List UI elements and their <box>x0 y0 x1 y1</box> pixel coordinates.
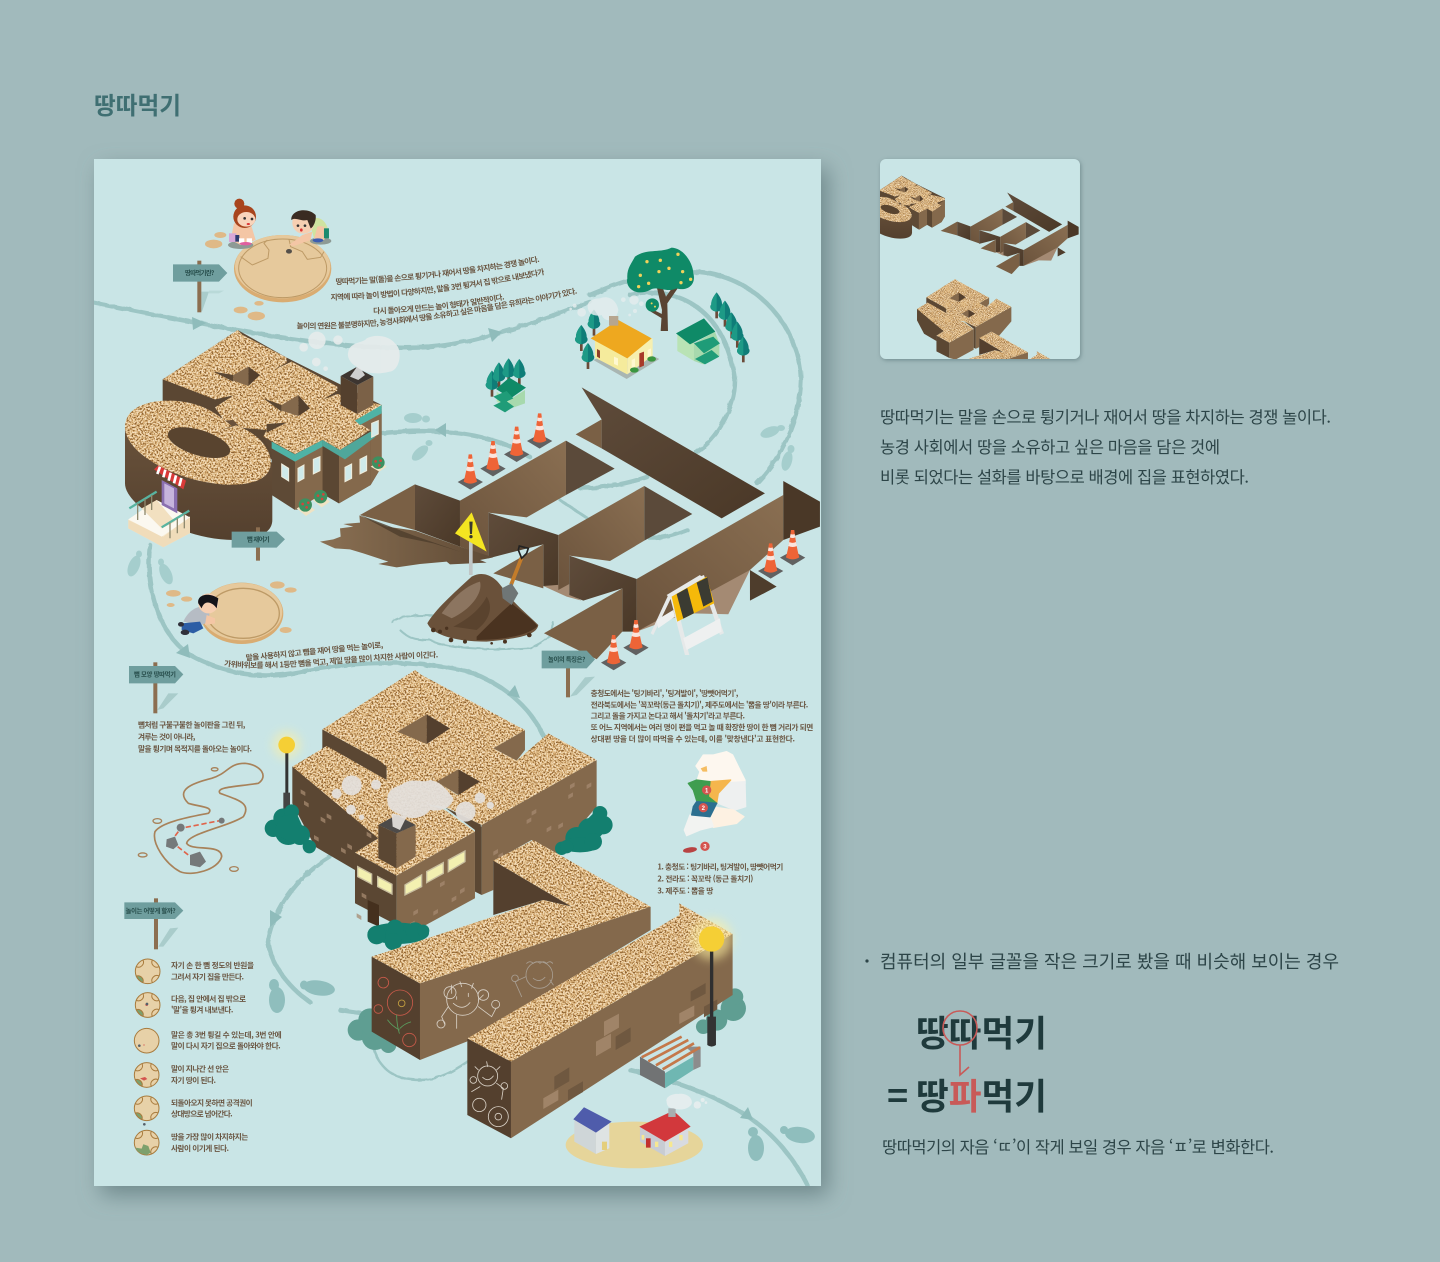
stepping stones <box>205 232 265 320</box>
winding route drawing <box>138 763 263 873</box>
text: rules <box>138 721 252 752</box>
sign: 뼘 재어기: 뼘 재어기 <box>247 534 270 543</box>
soil spill and trench <box>320 387 820 670</box>
thumbnail: middle letter <box>917 279 1011 360</box>
step descriptions: 자기 손 한 뼘 정도의 반원을 <box>171 960 254 971</box>
title: 땅따먹기 <box>94 86 181 121</box>
regional text: 상대편 땅을 더 많이 따먹을 수 있는데, 이를 '맞창낸다'고 표현한다. <box>591 733 795 744</box>
intro text on curve: 지역에 따라 놀이 방법이 다양하지만, 말을 3번 튕겨서 집 밖으로 내보냈다가 <box>330 268 544 300</box>
thumbnail: bottom letter <box>941 332 1053 424</box>
map legend <box>657 861 783 896</box>
teal bushes <box>265 804 613 855</box>
step descriptions: 상대방으로 넘어간다. <box>171 1109 233 1120</box>
middle route caption: 말을 사용하지 않고 뼘을 재어 땅을 먹는 놀이로, <box>245 639 384 664</box>
text: rules: 뼘처럼 구불구불한 놀이판을 그린 뒤, <box>138 719 246 730</box>
step icons <box>134 959 160 1155</box>
regional text: 충청도에서는 '팅기바리', '팅겨발이', '땅뺏어먹기', <box>591 688 739 699</box>
wall bricks <box>543 1005 694 1109</box>
teal roof trim <box>272 405 382 462</box>
description text: 농경 사회에서 땅을 소유하고 싶은 마음을 담은 것에 <box>880 434 1220 458</box>
green house 1 <box>676 318 720 364</box>
yellow house <box>591 316 659 379</box>
sign: 땅따먹기란? <box>173 261 227 312</box>
step descriptions: 되돌아오지 못하면 공격권이 <box>171 1097 253 1108</box>
regional text: 전라북도에서는 '꼭꼬락(동근 돌치기)', 제주도에서는 '뽐을 땅'이라 부른다. <box>591 699 808 710</box>
middle left section <box>129 581 297 873</box>
barricade <box>651 575 724 655</box>
pine trees <box>486 292 750 397</box>
step descriptions: 말이 다시 자기 집으로 돌아와야 한다. <box>171 1041 281 1052</box>
red house <box>639 1108 691 1156</box>
shovel <box>502 546 528 605</box>
thumbnail: top letter <box>868 176 945 239</box>
chimney <box>341 365 373 414</box>
intro text on curve: 다시 돌아오게 만드는 놀이 형태가 일반적이다. <box>374 294 504 314</box>
chimney <box>378 815 416 868</box>
smoke top <box>299 332 400 373</box>
korea map <box>683 752 746 854</box>
chalk doodles <box>374 962 553 1127</box>
sign: 뼘 모양 땅따먹기: 뼘 모양 땅따먹기 <box>134 670 176 679</box>
sign: 놀이는 어떻게 할까? <box>124 898 183 949</box>
boy character <box>289 210 331 246</box>
street lamp <box>691 918 732 1047</box>
blue house <box>573 1107 612 1154</box>
sign <box>542 651 595 697</box>
tree <box>627 248 694 331</box>
step descriptions: 자기 땅이 된다. <box>171 1075 216 1086</box>
traffic cones <box>458 413 805 670</box>
sign: 뼘 모양 땅따먹기 <box>129 662 183 713</box>
panel: poster <box>91 158 838 1205</box>
street lamp <box>273 731 301 811</box>
trench letter <box>360 387 820 659</box>
map legend: 1. 충청도 : 팅기바리, 팅겨발이, 땅뺏어먹기 <box>657 861 783 872</box>
village: tree and houses <box>486 248 750 412</box>
step descriptions <box>171 960 282 1154</box>
smoke cloud <box>569 295 644 320</box>
step descriptions: 말이 지나간 선 안은 <box>171 1063 229 1074</box>
note: font misreading: 컴퓨터의 일부 글꼴을 작은 크기로 봤을 때 비슷해 보이는 경우 <box>880 948 1339 974</box>
sign: 놀이는 어떻게 할까?: 놀이는 어떻게 할까? <box>126 906 176 915</box>
red house smoke <box>666 1094 707 1110</box>
green house 2 <box>493 378 526 412</box>
muted bushes <box>348 988 746 1053</box>
step descriptions: 사람이 이기게 된다. <box>171 1143 229 1154</box>
footprints <box>125 413 816 1161</box>
sign: 뼘 재어기 <box>232 527 285 561</box>
note caption: 땅따먹기의 자음 ‘ㄸ’이 작게 보일 경우 자음 ‘ㅍ’로 변화한다. <box>882 1134 1274 1158</box>
regional text: 또 어느 지역에서는 여러 명이 편을 먹고 놀 때 확장한 땅이 한 뼘 거리가 되면 <box>591 722 813 733</box>
sand game disk <box>234 235 331 302</box>
description text: 비롯 되었다는 설화를 바탕으로 배경에 집을 표현하였다. <box>880 464 1249 488</box>
spilled soil <box>320 515 493 567</box>
comparison: = 땅파먹기: = <box>887 1068 908 1120</box>
bottom letter block <box>348 833 746 1168</box>
bench <box>640 1037 701 1088</box>
dirt pile <box>427 574 538 645</box>
girl character <box>228 199 256 249</box>
step descriptions: 말은 총 3번 튕길 수 있는데, 3번 안에 <box>171 1029 282 1040</box>
warning sign <box>455 512 487 575</box>
building windows and door <box>358 851 465 895</box>
entry stairs and awning <box>128 465 190 547</box>
korea map: 3 <box>703 845 707 851</box>
description text: 땅따먹기는 말을 손으로 튕기거나 재어서 땅을 차지하는 경쟁 놀이다. <box>880 404 1331 428</box>
sign and kids section <box>173 198 577 330</box>
sand yard <box>566 1122 703 1168</box>
middle route caption <box>224 642 438 668</box>
sand letter block <box>125 330 382 540</box>
description text <box>880 404 1331 488</box>
middle route caption: 가위바위보를 해서 1등만 뼘을 먹고, 제일 땅을 많이 차지한 사람이 이긴다. <box>224 651 438 668</box>
smoke <box>332 775 494 830</box>
sign: 땅따먹기란?: 땅따먹기란? <box>185 268 214 277</box>
intro text on curve <box>296 256 577 330</box>
comparison: = 땅파먹기: 땅파먹기 <box>916 1068 1047 1120</box>
text: rules: 말을 튕기며 목적지를 돌아오는 놀이다. <box>138 743 252 754</box>
sand disk boy <box>166 581 297 644</box>
house windows <box>282 421 378 482</box>
text: rules: 겨루는 것이 아니라, <box>138 731 196 742</box>
thumbnail card <box>868 159 1080 424</box>
korea map: 2 <box>702 806 706 812</box>
top letter block with house <box>125 330 400 561</box>
step descriptions: 땅을 가장 많이 차지하지는 <box>171 1132 248 1143</box>
intro text on curve: 땅따먹기는 말(돌)을 손으로 튕기거나 재어서 땅을 차지하는 경쟁 놀이다. <box>336 256 540 285</box>
wall bricks <box>301 782 591 927</box>
sand letter block <box>372 840 733 1138</box>
comparison: 땅따먹기: 땅따먹기 <box>916 1005 1047 1057</box>
map legend: 2. 전라도 : 꼭꼬락 (동근 돌치기) <box>657 873 753 884</box>
how to play section <box>124 898 282 1155</box>
flower boxes <box>297 456 387 516</box>
intro text on curve: 놀이의 연원은 불분명하지만, 농경사회에서 땅을 소유하고 싶은 마음을 담은 유희라는 이야기가 있다. <box>296 288 577 330</box>
sand letter block <box>292 670 597 930</box>
red circle and arrow <box>943 1011 977 1075</box>
thumbnail: trench letter <box>941 193 1079 274</box>
regional text: 그리고 돌을 가지고 논다고 해서 '돌치기'라고 부른다. <box>591 711 745 722</box>
step descriptions: '말'을 튕겨 내보낸다. <box>171 1005 233 1016</box>
teal bush top <box>367 833 602 950</box>
route path across the poster <box>90 272 808 1186</box>
korea map: 1 <box>705 788 709 794</box>
sign: 놀이의 특징은? <box>548 655 585 664</box>
step descriptions: 그려서 자기 집을 만든다. <box>171 971 244 982</box>
regional text <box>591 688 813 744</box>
step descriptions: 다음, 집 안에서 집 밖으로 <box>171 993 246 1004</box>
sign + text: 놀이의 특징은? <box>542 651 813 896</box>
route arrows <box>176 317 753 1120</box>
middle letter block <box>265 670 613 930</box>
map legend: 3. 제주도 : 뽐을 땅 <box>657 885 713 896</box>
